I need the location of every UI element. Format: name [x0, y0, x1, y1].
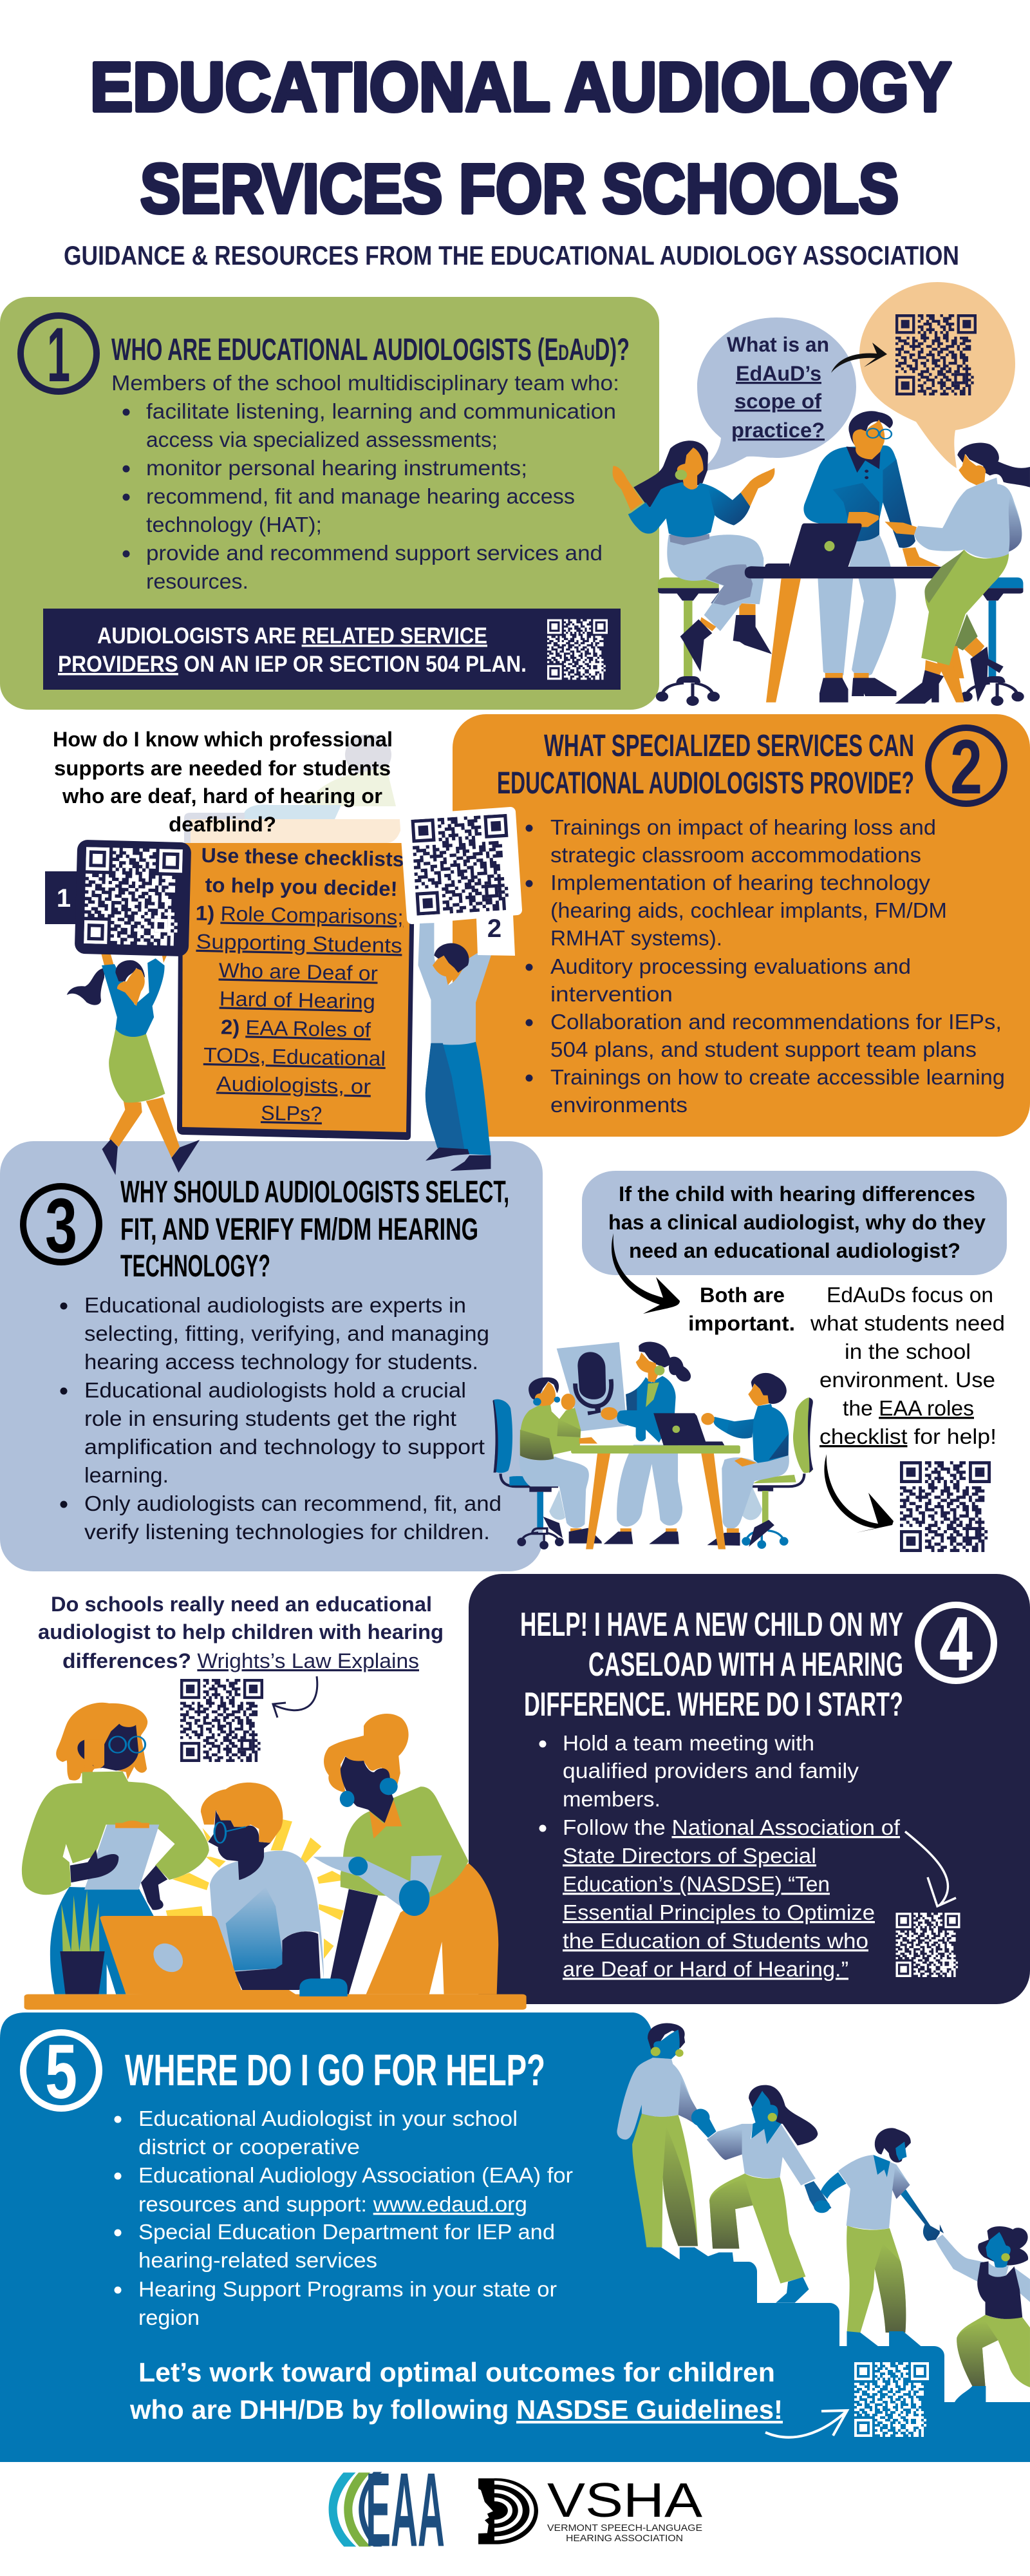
bullet list 4: Follow the National Association of [563, 1815, 901, 1839]
bullet list 1: access via specialized assessments; [146, 428, 498, 451]
QR: NASDSE guidelines [854, 2362, 929, 2437]
speech bubble: orange with QR [859, 282, 1015, 468]
panel 1: who are educational audiologists [0, 297, 659, 710]
bullet list 3: verify listening technologies for children. [84, 1520, 490, 1544]
number badge 4 [918, 1601, 994, 1687]
bullet list 3 [61, 1293, 501, 1544]
panel 2: what specialized services [453, 714, 1030, 1137]
heading 1: WHO ARE EDUCATIONAL AUDIOLOGISTS (EdAuD)? [111, 333, 630, 367]
bullet list 3: hearing access technology for students. [84, 1350, 478, 1374]
QR card 2 [405, 812, 517, 956]
bullet list 3: amplification and technology to support [84, 1435, 485, 1459]
text: EdAuDs focus: the EAA roles [843, 1396, 974, 1420]
bullet list 2: Trainings on impact of hearing loss and [550, 815, 936, 839]
bullet list 2: strategic classroom accommodations [550, 843, 921, 867]
call to action: who are DHH/DB by following NASDSE Guidelines! [129, 2394, 783, 2425]
left chair [492, 1399, 564, 1549]
speech bubble: what is an EdAuD's scope of practice: scope of [735, 390, 821, 413]
VSHA name: VSHA [547, 2473, 702, 2527]
checklist text: 1) Role Comparisons; [195, 902, 404, 929]
number badge 2 [928, 724, 1004, 810]
bullet list 3: Educational audiologists are experts in [84, 1293, 466, 1317]
checklist text: to help you decide! [205, 873, 398, 900]
faded figure behind question [184, 734, 400, 844]
arrow to NASDSE guidelines QR [765, 2410, 847, 2438]
QR: roles checklist [900, 1461, 991, 1552]
heading 4 [520, 1606, 903, 1723]
checklist text: 2) EAA Roles of [221, 1015, 371, 1041]
QR card 1 [45, 840, 191, 956]
QR: Wrights law [180, 1679, 263, 1762]
bullet list 2: intervention [550, 982, 673, 1006]
question: which professional supports: who are deaf, hard of hearing or [62, 784, 382, 808]
bullet list 5: Special Education Department for IEP and [138, 2220, 555, 2244]
person: woman holding QR card [67, 953, 200, 1175]
checklist text: Audiologists, or [216, 1072, 371, 1098]
bullet list 5: region [138, 2306, 200, 2329]
number badge 3: 3 [45, 1182, 77, 1269]
speech bubble: what is an EdAuD's scope of practice: practice? [731, 419, 825, 442]
person 4 [935, 2226, 1030, 2402]
bullet list 4: State Directors of Special [563, 1844, 816, 1868]
logo: VSHA: VERMONT SPEECH-LANGUAGE [547, 2523, 702, 2533]
person 3 [814, 2128, 944, 2346]
question: which professional supports [53, 728, 393, 836]
bullet list 1: Members of the school multidisciplinary team who: [111, 371, 619, 395]
checklist text: Supporting Students [196, 930, 402, 957]
bullet list 2: 504 plans, and student support team plans [550, 1037, 977, 1061]
bullet list 5: Educational Audiology Association (EAA) for [138, 2163, 573, 2187]
bullet list 2: Trainings on how to create accessible learning [550, 1065, 1005, 1089]
bullet list 3: role in ensuring students get the right [84, 1406, 456, 1430]
bullet list 1: recommend, fit and manage hearing access [146, 484, 575, 508]
bullet list 1 [111, 371, 619, 593]
bullet list 4: members. [563, 1787, 660, 1811]
number badge 5 [23, 2029, 99, 2115]
bullet list 4: Education’s (NASDSE) “Ten [563, 1872, 830, 1896]
text: both are important: important. [688, 1312, 795, 1335]
callout: why need an educational audiologist: need an educational audiologist? [629, 1239, 960, 1262]
text: EdAuDs focus [810, 1283, 1005, 1448]
bullet list 5: resources and support: www.edaud.org [138, 2192, 527, 2216]
checklist text: Who are Deaf or [218, 958, 379, 985]
bullet list 4: Essential Principles to Optimize [563, 1900, 875, 1924]
callout: why need an educational audiologist: has a clinical audiologist, why do they [608, 1211, 986, 1234]
person: left woman with clipboard [22, 1703, 209, 1994]
logo: VSHA: HEARING ASSOCIATION [566, 2533, 683, 2544]
bullet list 2: (hearing aids, cochlear implants, FM/DM [550, 898, 947, 922]
title [90, 48, 951, 227]
question: do schools need an educational audiologist [38, 1593, 444, 1672]
number badge 1: 1 [47, 312, 70, 398]
question: which professional supports: supports are needed for students [54, 757, 391, 780]
QR: NASDSE principles [896, 1913, 960, 1977]
heading 2 [497, 729, 914, 800]
bullet list 2: environments [550, 1093, 688, 1117]
related service providers banner: PROVIDERS ON AN IEP OR SECTION 504 PLAN. [58, 652, 527, 677]
question: do schools need an educational audiologist: differences? Wrights’s Law Explains [62, 1649, 419, 1672]
question: which professional supports: How do I know which professional [53, 728, 393, 751]
text: EdAuDs focus: EdAuDs focus on [827, 1283, 993, 1307]
speech bubble: what is an EdAuD's scope of practice: What is an [727, 333, 829, 356]
heading 3: TECHNOLOGY? [120, 1249, 270, 1283]
table with laptop [766, 578, 964, 703]
person: center man [201, 1783, 324, 1990]
call to action [129, 2357, 783, 2425]
bullet list 4: qualified providers and family [563, 1759, 859, 1783]
left stool [656, 578, 720, 706]
checklist text: SLPs? [261, 1101, 323, 1126]
question: do schools need an educational audiologist: audiologist to help children with hearing [38, 1620, 444, 1643]
call to action: Let’s work toward optimal outcomes for children [138, 2357, 775, 2387]
QR card 1: 1 [57, 884, 71, 913]
panel 5: where do I go for help [0, 2012, 1030, 2462]
heading 3: WHY SHOULD AUDIOLOGISTS SELECT, [120, 1175, 509, 1209]
bullet list 3: learning. [84, 1463, 169, 1487]
bullet list 2: Implementation of hearing technology [550, 871, 931, 895]
person: standing center [601, 1341, 691, 1544]
arrow to QR in bubble [831, 343, 887, 373]
number badge 4: 4 [939, 1601, 973, 1687]
heading 3: FIT, AND VERIFY FM/DM HEARING [120, 1213, 478, 1247]
number badge 3 [23, 1182, 99, 1269]
panel 3: why should audiologists select, fit and verify [0, 1141, 543, 1571]
title: EDUCATIONAL AUDIOLOGY [90, 48, 951, 126]
checklist board [177, 843, 415, 1140]
text: EdAuDs focus: what students need [810, 1311, 1005, 1335]
text: EdAuDs focus: checklist for help! [819, 1425, 997, 1448]
checklist text: TODs, Educational [203, 1043, 386, 1070]
number badge 2: 2 [950, 724, 982, 810]
bullet list 1: provide and recommend support services and [146, 541, 603, 565]
bullet list 4: the Education of Students who [563, 1929, 868, 1953]
bullet list 1: resources. [146, 569, 248, 593]
arrow to checklist QR [824, 1454, 894, 1533]
bullet list 1: facilitate listening, learning and communication [146, 399, 616, 423]
person 1 [617, 2023, 734, 2264]
text: EdAuDs focus: in the school [845, 1340, 971, 1363]
callout: why need an educational audiologist [582, 1171, 1007, 1275]
question: which professional supports: deafblind? [169, 813, 276, 836]
bullet list 4 [539, 1731, 901, 1981]
speech bubble: what is an EdAuD's scope of practice [697, 317, 856, 471]
illustration: three colleagues at a desk [22, 1703, 527, 2010]
arrow to NASDSE QR [905, 1832, 956, 1906]
text: both are important [688, 1283, 795, 1335]
bullet list 2: Collaboration and recommendations for IEPs, [550, 1010, 1002, 1034]
person: left seated [520, 1378, 602, 1544]
infographic canvas: EAA [366, 2451, 445, 2568]
sunburst rays [166, 1819, 344, 1959]
illustration: team around table with microphone [492, 1341, 813, 1549]
bullet list 2: Auditory processing evaluations and [550, 954, 911, 978]
laptop and table [571, 1413, 740, 1549]
heading 3 [120, 1175, 509, 1283]
number badge 5: 5 [45, 2029, 77, 2115]
number badge 1 [21, 312, 97, 398]
checklist text [191, 844, 405, 1127]
person: seated woman right [885, 442, 1030, 704]
illustration: people climbing stairs hand in hand [617, 2023, 1030, 2402]
related service providers banner [43, 609, 621, 690]
illustration: three colleagues at a table [613, 411, 1030, 706]
bullet list 2: RMHAT systems). [550, 926, 722, 950]
text: EdAuDs focus: environment. Use [819, 1368, 995, 1392]
bullet list 1: technology (HAT); [146, 513, 322, 536]
title: SERVICES FOR SCHOOLS [140, 149, 899, 227]
bullet list 4: are Deaf or Hard of Hearing.” [563, 1957, 848, 1981]
bullet list 3: selecting, fitting, verifying, and managing [84, 1321, 489, 1345]
bullet list 2 [525, 815, 1005, 1117]
right stool [960, 578, 1024, 706]
checklist text: Hard of Hearing [220, 987, 375, 1013]
checklist text: Use these checklists [201, 844, 404, 871]
bullet list 5: hearing-related services [138, 2248, 377, 2272]
right chair [742, 1397, 813, 1549]
person: right woman with paper [313, 1714, 498, 1994]
person: man holding QR card [418, 923, 492, 1171]
QR card 2: 2 [487, 914, 501, 943]
person: standing man [745, 411, 946, 703]
speech bubble: what is an EdAuD's scope of practice: EdAuD’s [736, 362, 821, 385]
person: seated woman [613, 440, 774, 672]
bullet list 3: Educational audiologists hold a crucial [84, 1378, 466, 1402]
plant and laptop [60, 1890, 299, 1996]
arrow to Wrights law QR [273, 1676, 317, 1718]
bullet list 5: district or cooperative [138, 2135, 360, 2159]
arrow to both are important [612, 1233, 680, 1314]
bullet list 1: monitor personal hearing instruments; [146, 456, 527, 480]
logo: VSHA [477, 2473, 702, 2544]
microphone card [557, 1342, 627, 1431]
person: right seated [701, 1373, 789, 1547]
callout: why need an educational audiologist: If the child with hearing differences [619, 1182, 975, 1206]
VSHA emblem [477, 2478, 538, 2544]
bullet list 5: Educational Audiologist in your school [138, 2107, 518, 2130]
panel 4: help I have a new child [469, 1574, 1030, 2004]
desk [24, 1978, 527, 2010]
related service providers banner: AUDIOLOGISTS ARE RELATED SERVICE [97, 623, 487, 649]
person 2 [692, 2085, 831, 2303]
text: both are important: Both are [700, 1283, 785, 1307]
bullet list 3: Only audiologists can recommend, fit, and [84, 1492, 501, 1515]
bullet list 5 [115, 2107, 573, 2329]
heading 5: WHERE DO I GO FOR HELP? [125, 2045, 545, 2095]
logo: EAA [329, 2451, 445, 2568]
bullet list 4: Hold a team meeting with [563, 1731, 814, 1755]
question: do schools need an educational audiologist: Do schools really need an educational [51, 1593, 432, 1616]
bullet list 5: Hearing Support Programs in your state or [138, 2277, 557, 2301]
